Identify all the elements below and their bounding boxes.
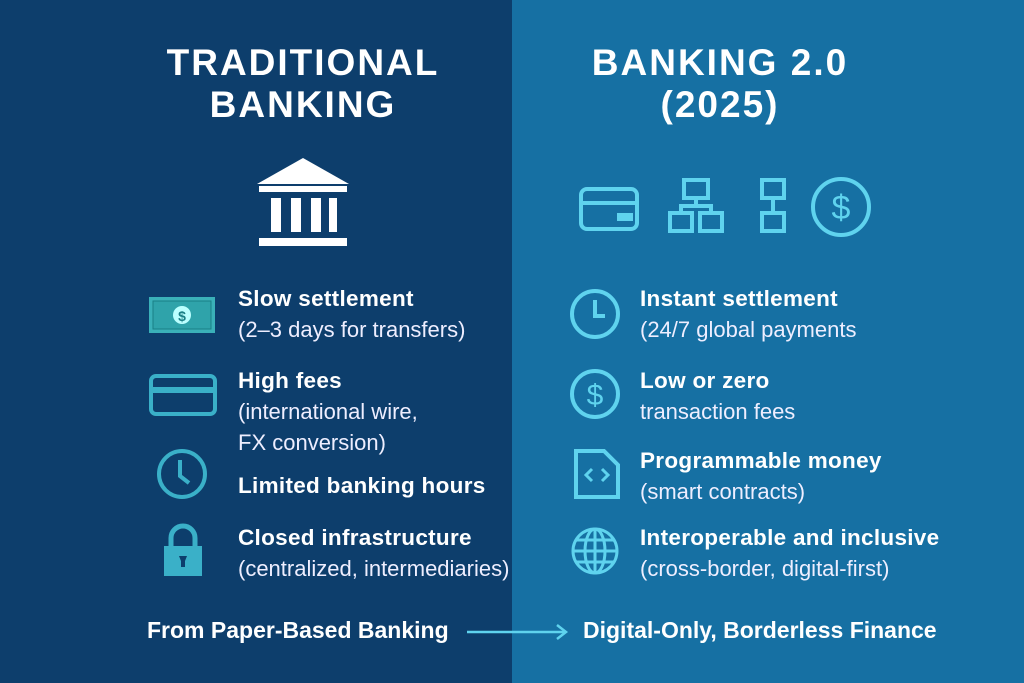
title: banking 2.0: BANKING 2.0 xyxy=(592,42,848,83)
item: programmable money xyxy=(574,448,882,504)
text: FX conversion) xyxy=(238,430,386,455)
icon: bank xyxy=(257,158,349,246)
item: limited hours xyxy=(157,449,486,499)
text: $ xyxy=(587,379,604,412)
item: instant settlement xyxy=(570,286,856,342)
text: High fees xyxy=(238,368,342,393)
item: low fees xyxy=(570,368,795,424)
text: Interoperable and inclusive xyxy=(640,525,939,550)
text: Instant settlement xyxy=(640,286,838,311)
title: banking 2.0: (2025) xyxy=(661,84,779,125)
item: interoperable xyxy=(572,525,939,581)
text: (centralized, intermediaries) xyxy=(238,556,509,581)
title: traditional banking: BANKING xyxy=(210,84,396,125)
arrow xyxy=(467,624,568,640)
text: Closed infrastructure xyxy=(238,525,472,550)
text: Low or zero xyxy=(640,368,770,393)
icons: digital row xyxy=(579,177,871,237)
text: (24/7 global payments xyxy=(640,317,856,342)
item: slow settlement xyxy=(149,286,465,342)
text: (smart contracts) xyxy=(640,479,805,504)
text: transaction fees xyxy=(640,399,795,424)
icons: digital row: $ xyxy=(832,189,851,227)
text: (2–3 days for transfers) xyxy=(238,317,465,342)
footer: from: From Paper-Based Banking xyxy=(147,617,449,643)
title: banking 2.0 xyxy=(592,42,848,125)
title: traditional banking: TRADITIONAL xyxy=(167,42,439,83)
text: (international wire, xyxy=(238,399,418,424)
text: Slow settlement xyxy=(238,286,414,311)
footer: to: Digital-Only, Borderless Finance xyxy=(583,617,937,643)
text: (cross-border, digital-first) xyxy=(640,556,889,581)
item: high fees xyxy=(149,368,418,455)
item: closed infrastructure xyxy=(164,524,509,581)
title: traditional banking xyxy=(167,42,439,125)
text: $ xyxy=(178,308,186,324)
text: Limited banking hours xyxy=(238,473,486,498)
text: Programmable money xyxy=(640,448,882,473)
